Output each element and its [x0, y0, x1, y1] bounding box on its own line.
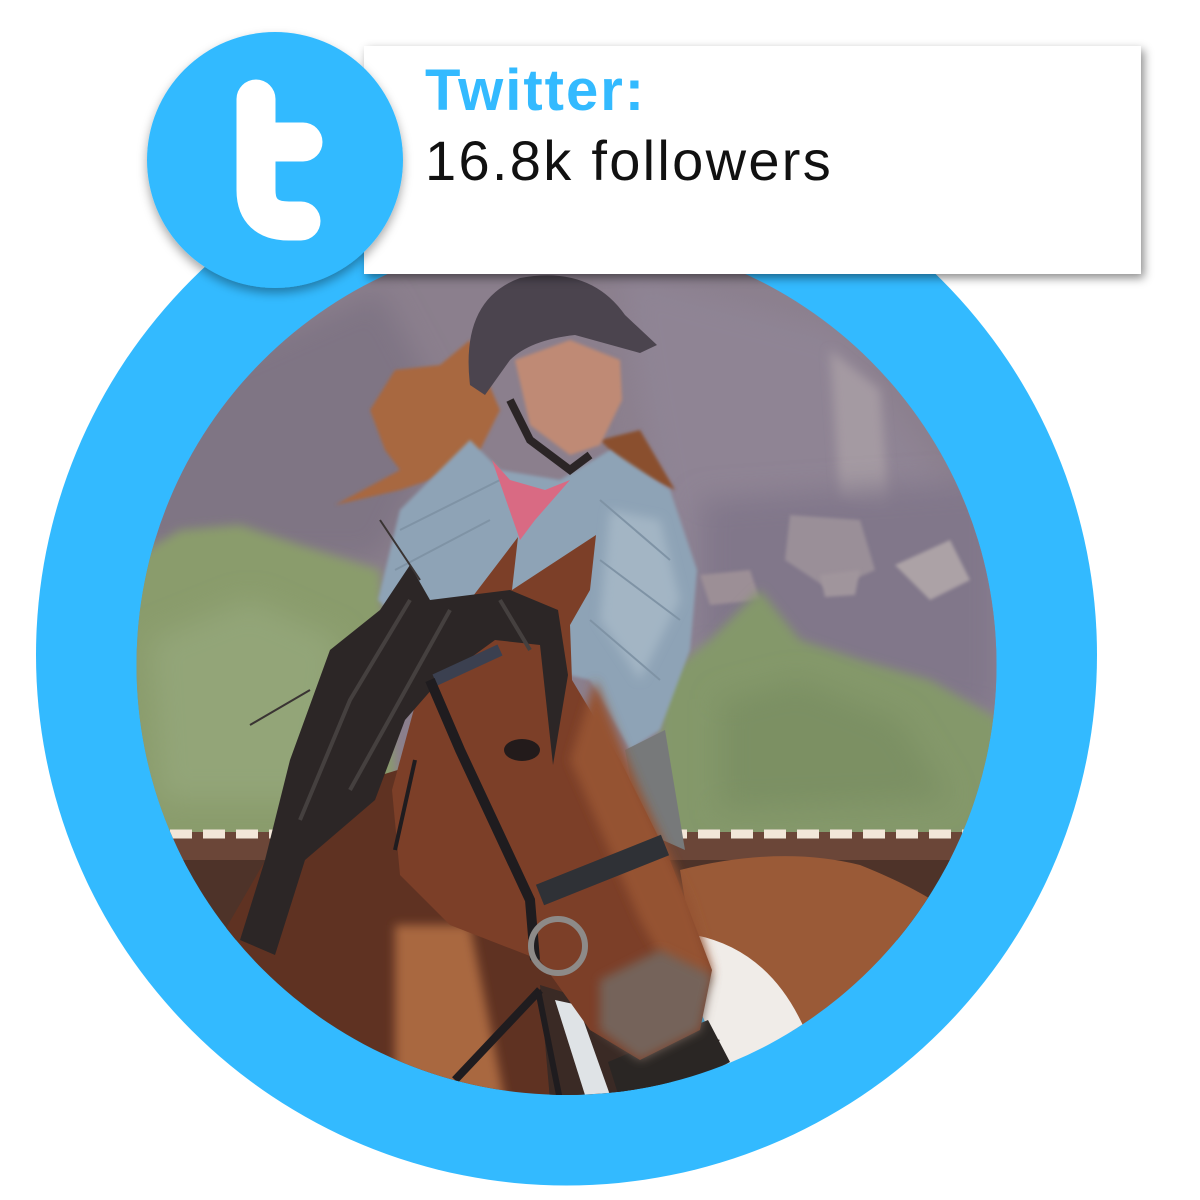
fence: [130, 832, 1010, 940]
photo: [130, 230, 1010, 1100]
white saddle pad: [695, 935, 805, 1070]
mane: [240, 520, 568, 955]
hair: [335, 340, 500, 505]
face: [515, 340, 622, 455]
horse body: [225, 760, 640, 1100]
jacket: [378, 440, 697, 850]
heading: Twitter:: [425, 58, 646, 123]
blue ring: [36, 124, 1097, 1186]
bridle: [395, 650, 665, 1100]
eye: [504, 739, 540, 761]
green bushes: [130, 525, 1000, 840]
second horse rump: [680, 856, 940, 1040]
rock hillside background: [130, 230, 1010, 870]
horse head: [392, 535, 712, 1060]
letter t icon: [256, 99, 303, 221]
profile photo in blue ring: [36, 252, 1097, 1186]
helmet: [469, 275, 657, 395]
saddle and rider leg: [540, 985, 720, 1100]
follower count: 16.8k followers: [425, 129, 833, 192]
stat card: [364, 46, 1141, 274]
pink collar: [492, 460, 570, 540]
